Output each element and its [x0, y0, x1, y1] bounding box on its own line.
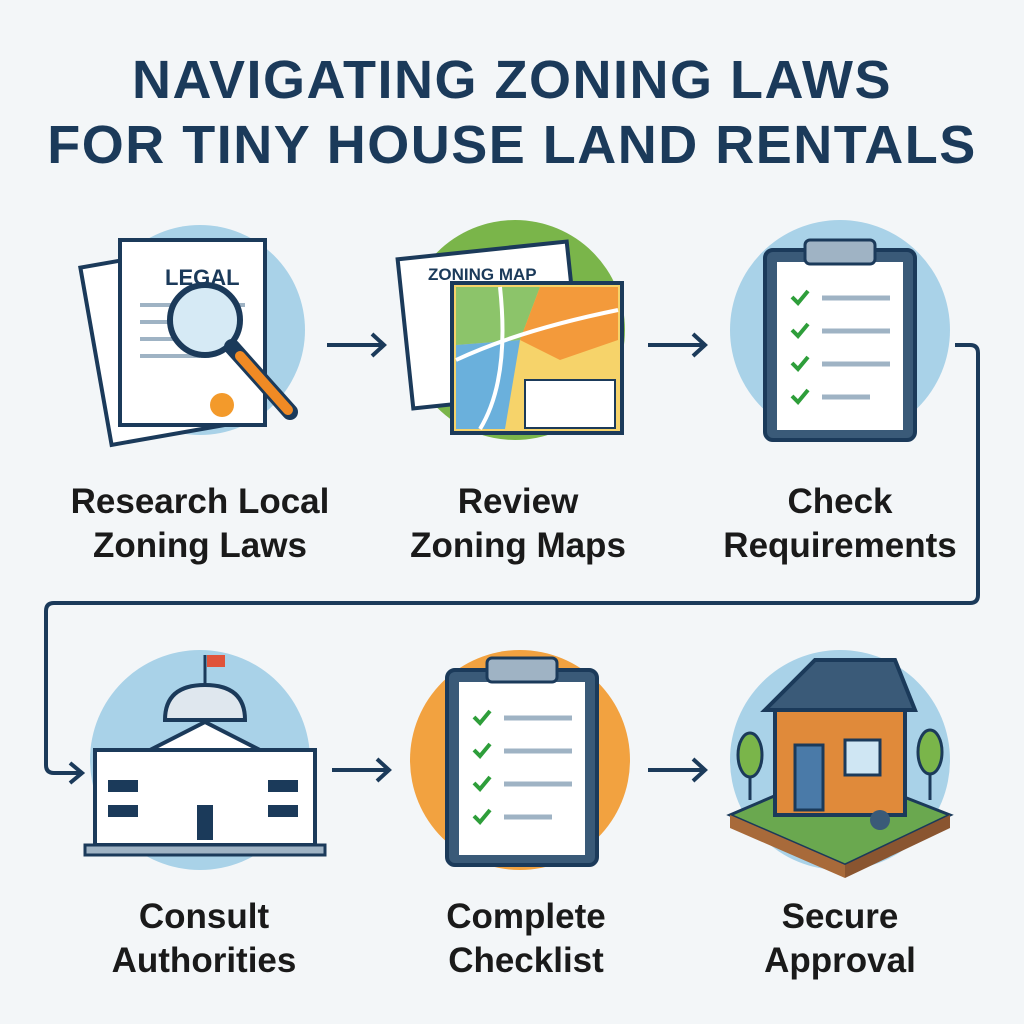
title [47, 50, 977, 175]
label: step 3 [723, 482, 957, 565]
connector arrow between rows [46, 345, 978, 783]
label: step 3: Check [787, 482, 893, 521]
step 1 icon: legal documents with magnifier: LEGAL [165, 265, 240, 290]
step 4 icon: government building [85, 650, 325, 870]
label: step 6: Approval [764, 941, 916, 980]
title: NAVIGATING ZONING LAWS [132, 50, 892, 110]
arrow 3 [332, 759, 389, 781]
label: step 6 [764, 897, 916, 980]
label: step 5 [446, 897, 606, 980]
step 5 icon: completed checklist [410, 650, 630, 870]
label: step 5: Checklist [448, 941, 604, 980]
label: step 4: Authorities [112, 941, 296, 980]
step 2 icon: zoning maps [398, 220, 625, 440]
label: step 2: Review [458, 482, 578, 521]
arrow 4 [648, 759, 705, 781]
step 1 icon: legal documents with magnifier [80, 225, 305, 445]
label: step 6: Secure [782, 897, 898, 936]
label: step 3: Requirements [723, 526, 957, 565]
arrow 2 [648, 334, 705, 356]
label: step 2: Zoning Maps [410, 526, 626, 565]
step 6 icon: tiny house [730, 650, 950, 878]
label: step 1: Zoning Laws [93, 526, 307, 565]
label: step 1 [71, 482, 329, 565]
label: step 4 [112, 897, 296, 980]
step 3 icon: clipboard checklist [730, 220, 950, 440]
label: step 4: Consult [139, 897, 269, 936]
label: step 2 [410, 482, 626, 565]
label: step 1: Research Local [71, 482, 329, 521]
arrow 1 [327, 334, 384, 356]
title: FOR TINY HOUSE LAND RENTALS [47, 115, 977, 175]
label: step 5: Complete [446, 897, 606, 936]
step 2 icon: zoning maps: ZONING MAP [428, 265, 537, 284]
